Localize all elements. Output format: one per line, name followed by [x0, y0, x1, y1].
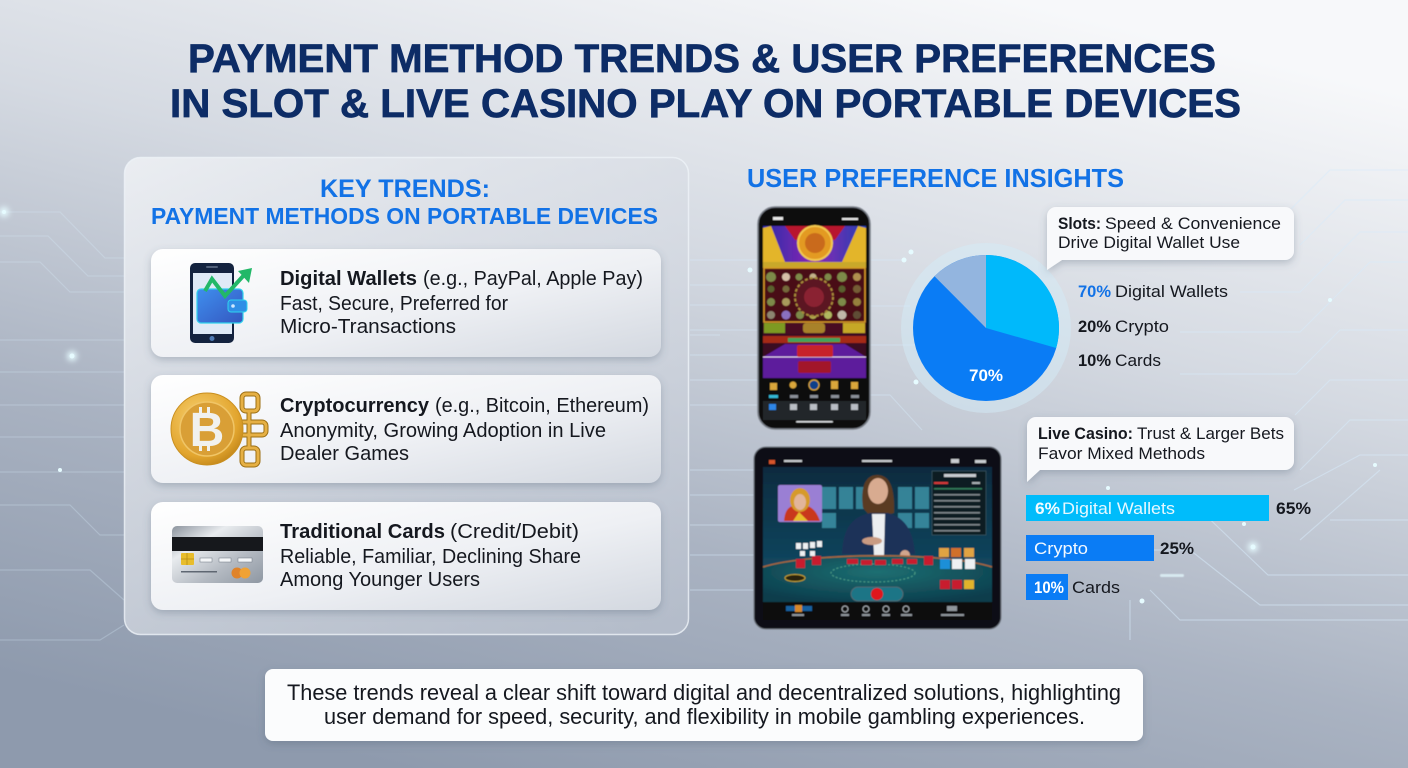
pie legend: Digital Wallets: [1115, 282, 1228, 301]
cryptocurrency text: Cryptocurrency: [280, 395, 430, 417]
cryptocurrency text: Anonymity, Growing Adoption in Live: [280, 420, 606, 442]
panel heading: [151, 175, 658, 229]
card: cryptocurrency: [151, 375, 661, 483]
traditional cards text: (Credit/Debit): [450, 521, 579, 543]
callout: slots: Slots:: [1058, 214, 1101, 233]
callout: live casino: Favor Mixed Methods: [1038, 444, 1205, 463]
cryptocurrency text: [280, 395, 649, 465]
title: [170, 37, 1241, 126]
panel: key trends: [124, 158, 688, 634]
title: PAYMENT METHOD TRENDS & USER PREFERENCES: [188, 37, 1216, 81]
heading: user preference insights: USER PREFERENCE INSIGHTS: [747, 163, 1124, 193]
digital wallets text: Micro-Transactions: [280, 316, 456, 338]
pie legend: 20%: [1078, 317, 1111, 336]
circuit pattern background: [0, 170, 1408, 640]
cryptocurrency text: (e.g., Bitcoin, Ethereum): [435, 395, 649, 417]
bar: digital wallets: 6%: [1035, 499, 1060, 518]
conclusion box: [265, 669, 1143, 741]
bar: cards: 10%: [1034, 578, 1064, 597]
bar: digital wallets: [1026, 495, 1311, 521]
circuit glow dots: [0, 207, 1377, 604]
scoreboard: [932, 471, 986, 535]
bar: cards: Cards: [1072, 578, 1120, 597]
pie chart: slots: 70%: [969, 366, 1003, 385]
title: IN SLOT & LIVE CASINO PLAY ON PORTABLE DEVICES: [170, 82, 1241, 126]
phone: slot game: [758, 207, 870, 429]
digital wallets text: Fast, Secure, Preferred for: [280, 293, 508, 315]
traditional cards text: Among Younger Users: [280, 569, 480, 591]
icon: bitcoin and chain: [171, 393, 266, 465]
bar: cards: [1026, 574, 1120, 600]
casino table: [763, 541, 992, 602]
digital wallets text: (e.g., PayPal, Apple Pay): [423, 268, 643, 290]
cryptocurrency text: Dealer Games: [280, 443, 409, 465]
tablet: live casino: [754, 447, 1001, 629]
bar: crypto: 25%: [1160, 539, 1194, 558]
panel heading: KEY TRENDS:: [320, 175, 490, 203]
callout: live casino: Trust & Larger Bets: [1137, 424, 1284, 443]
bar: crypto: [1026, 535, 1194, 561]
traditional cards text: [280, 521, 581, 591]
panel heading: PAYMENT METHODS ON PORTABLE DEVICES: [151, 203, 658, 229]
traditional cards text: Reliable, Familiar, Declining Share: [280, 546, 581, 568]
bar: digital wallets: Digital Wallets: [1062, 499, 1175, 518]
pie legend: Cards: [1115, 351, 1161, 370]
icon: phone wallet: [190, 263, 252, 343]
callout: live casino: Live Casino:: [1038, 424, 1133, 443]
pie chart: slots: [901, 243, 1071, 413]
conclusion box: These trends reveal a clear shift toward digital and decentralized solutions, highlighting: [287, 680, 1121, 705]
callout: live casino: [1027, 417, 1294, 482]
pie legend: 10%: [1078, 351, 1111, 370]
inset portrait: [778, 485, 822, 522]
callout: slots: [1047, 207, 1294, 270]
card: traditional cards: [151, 502, 661, 610]
bar chart: live casino: [1026, 495, 1311, 600]
traditional cards text: Traditional Cards: [280, 521, 445, 543]
callout: slots: Speed & Convenience: [1105, 214, 1281, 233]
pie legend: Crypto: [1115, 317, 1169, 336]
pie legend: 70%: [1078, 282, 1111, 301]
bar: digital wallets: 65%: [1276, 499, 1311, 518]
bar: crypto: Crypto: [1034, 539, 1088, 558]
pie legend: [1078, 282, 1228, 370]
icon: credit card: [172, 526, 263, 583]
conclusion box: user demand for speed, security, and flexibility in mobile gambling experiences.: [324, 704, 1085, 729]
icon: bitcoin and chain: B: [190, 404, 224, 457]
live dealer: [842, 475, 915, 560]
digital wallets text: [280, 268, 643, 338]
digital wallets text: Digital Wallets: [280, 268, 417, 290]
card: digital wallets: [151, 249, 661, 357]
callout: slots: Drive Digital Wallet Use: [1058, 233, 1240, 252]
